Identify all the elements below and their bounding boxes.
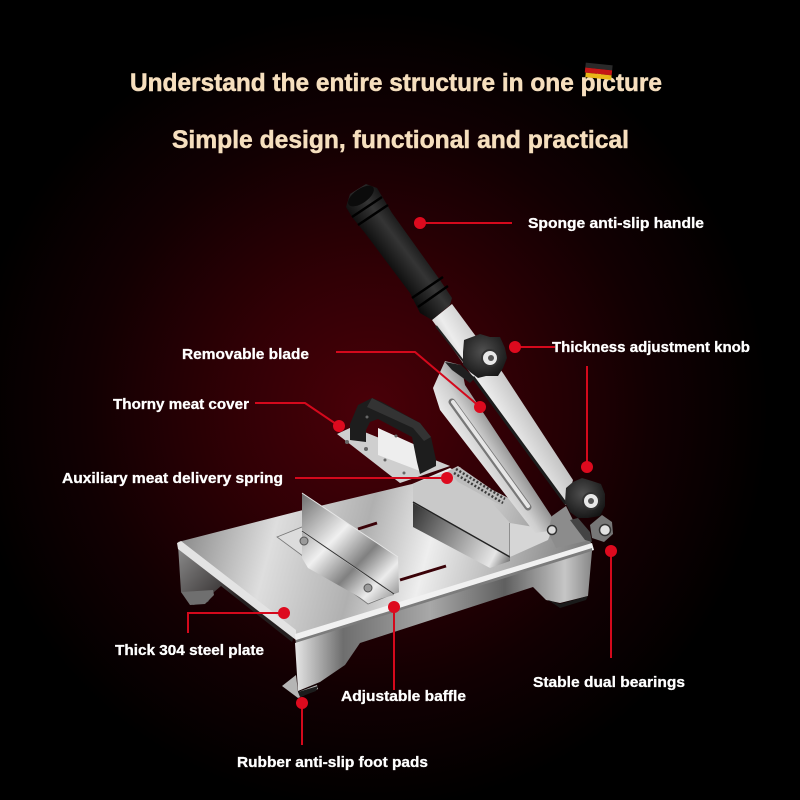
plate edge left — [177, 541, 296, 640]
blade arm — [432, 304, 573, 505]
front face — [295, 551, 592, 691]
feed trough face — [413, 503, 510, 568]
baffle foot plate — [277, 527, 398, 604]
callout: bearings — [533, 545, 685, 691]
lower knob — [565, 478, 605, 518]
adjustable baffle — [277, 493, 399, 604]
title line 2: Simple design, functional and practical — [172, 126, 629, 154]
guide plate — [433, 361, 556, 533]
callout: spring: Auxiliary meat delivery spring — [62, 471, 283, 487]
callout: foot pads — [237, 697, 428, 771]
slots — [358, 523, 377, 529]
callout: baffle — [341, 601, 466, 705]
callout: lower knob leader — [581, 366, 593, 473]
callout: blade: Removable blade — [182, 347, 309, 363]
meat cover — [337, 398, 450, 483]
cover spikes — [345, 416, 406, 474]
right foot pad — [548, 596, 588, 608]
callout: bearings: Stable dual bearings — [533, 675, 685, 691]
callout: baffle: Adjustable baffle — [341, 689, 466, 705]
callout: steel plate: Thick 304 steel plate — [115, 643, 264, 659]
upper knob — [463, 334, 507, 378]
front foot — [282, 675, 318, 698]
guide slot — [452, 402, 528, 507]
callout: steel plate — [115, 607, 290, 659]
title line 1: Understand the entire structure in one picture — [130, 69, 662, 97]
callout: meat cover — [113, 397, 345, 432]
left side leg — [178, 545, 295, 642]
feed trough top — [413, 467, 510, 556]
callout: knob: Thickness adjustment knob — [552, 340, 750, 356]
hinge bracket — [445, 362, 475, 383]
screws — [300, 537, 308, 545]
handle grip — [346, 184, 452, 320]
bearings — [570, 515, 613, 542]
baffle upright — [302, 493, 399, 594]
slicer illustration — [177, 182, 613, 698]
icon: German flag — [584, 63, 613, 80]
front fold — [295, 543, 594, 643]
title — [130, 69, 662, 154]
rear foot — [181, 590, 214, 605]
spring — [448, 466, 507, 506]
callout: blade — [182, 347, 486, 413]
handle — [345, 182, 452, 320]
callout: spring — [62, 471, 453, 487]
callout: meat cover: Thorny meat cover — [113, 397, 249, 413]
handle grooves — [352, 197, 448, 307]
callout: foot pads: Rubber anti-slip foot pads — [237, 755, 428, 771]
callout: handle: Sponge anti-slip handle — [528, 216, 704, 232]
top plate — [178, 468, 592, 634]
cover plate — [337, 427, 450, 483]
cover handle — [350, 398, 436, 474]
trough base — [510, 523, 552, 557]
callout: handle — [414, 216, 704, 232]
